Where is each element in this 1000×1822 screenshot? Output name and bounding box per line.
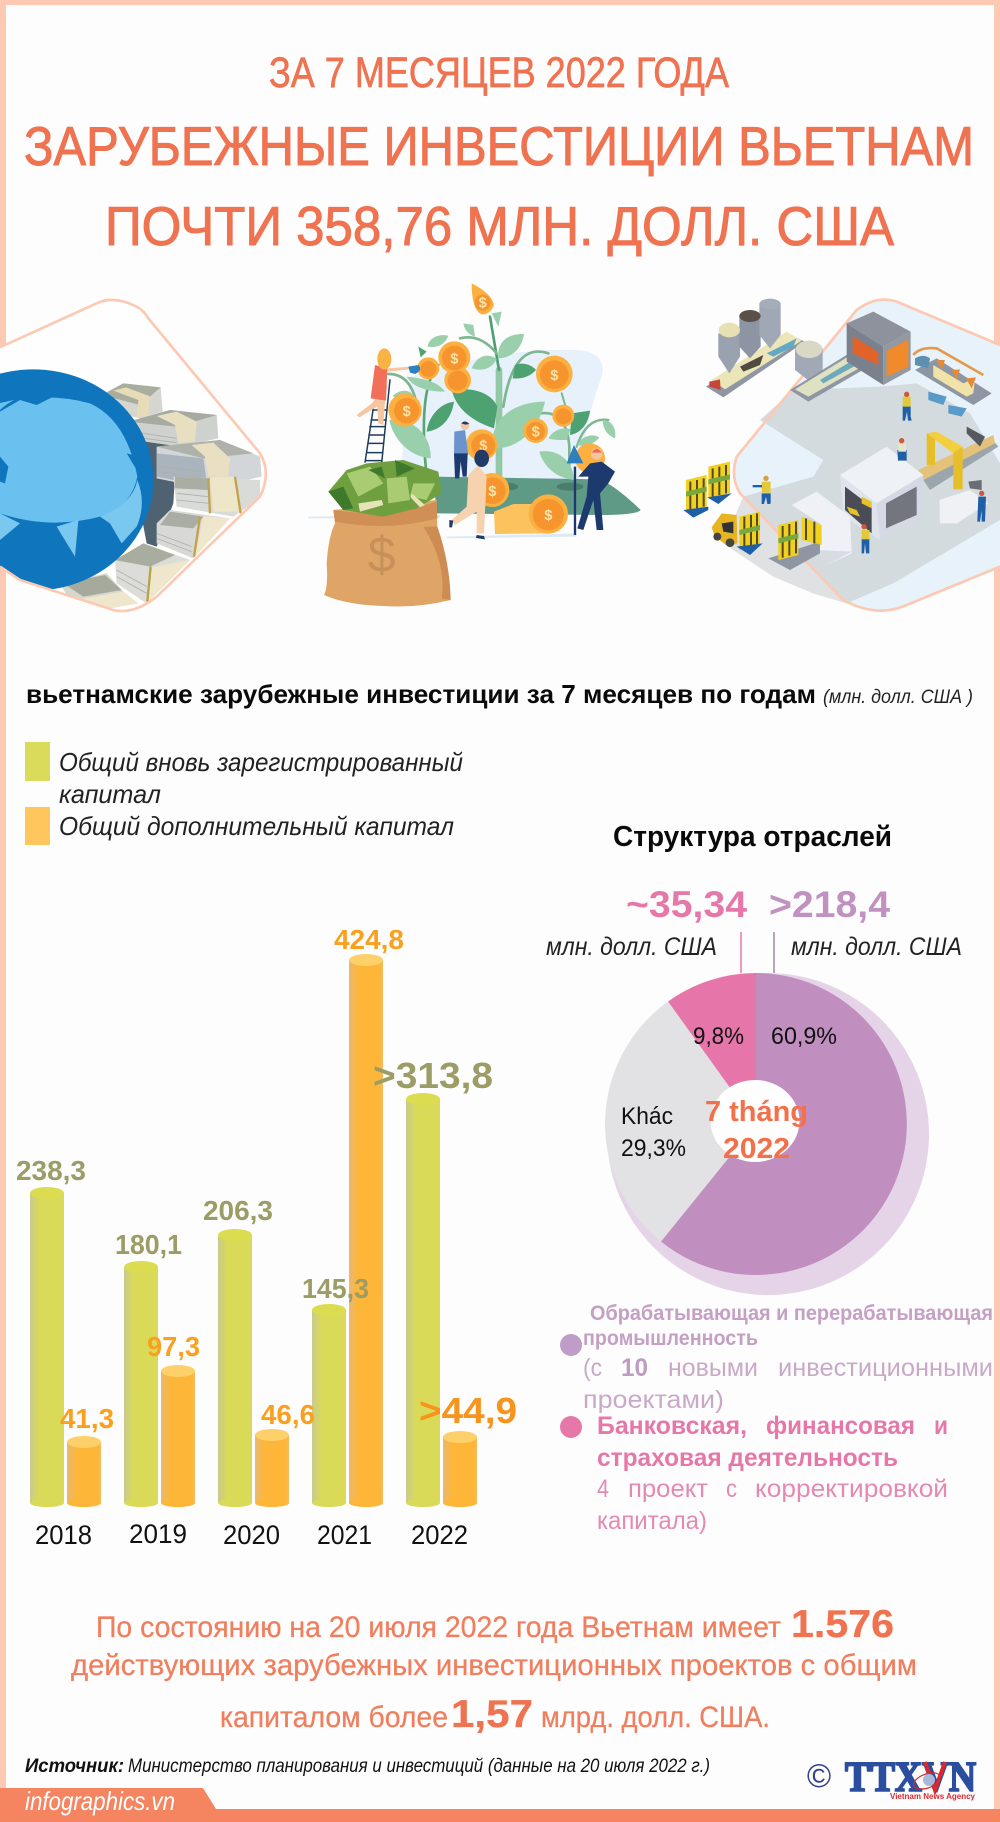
chart heading: вьетнамские зарубежные инвестиции за 7 месяцев по годам <box>26 679 816 709</box>
year labels: 2021 <box>317 1520 372 1550</box>
pie percentages: Khác <box>621 1103 673 1130</box>
packing gantry and conveyor <box>918 427 998 490</box>
legend: new capital label: Общий вновь зарегистрированный <box>59 747 463 777</box>
pie center label: 7 tháng <box>705 1096 808 1128</box>
furnace <box>847 312 911 385</box>
agency logo: Vietnam News Agency <box>890 1791 975 1801</box>
banknotes in sack <box>328 460 442 517</box>
copyright mark: © <box>807 1757 831 1794</box>
dollar marks on coins: $ <box>532 424 540 440</box>
year labels: 2020 <box>223 1520 280 1550</box>
bar chart <box>16 924 517 1550</box>
ladder <box>365 379 390 463</box>
pallets of goods <box>686 462 822 560</box>
dark leaves <box>418 347 590 435</box>
footer site name: infographics.vn <box>25 1786 175 1816</box>
legend: banking: с <box>726 1475 737 1503</box>
legend: banking: корректировкой <box>755 1475 948 1503</box>
slice: banking 9.8% <box>668 973 756 1124</box>
dollar marks on coins <box>403 296 558 524</box>
bars 2019 <box>124 1261 195 1507</box>
year labels: 2022 <box>411 1520 468 1550</box>
plant stems <box>388 317 608 477</box>
value: banking: ~35,34 <box>626 884 747 925</box>
source note: Министерство планирования и инвестиций (данные на 20 июля 2022 г.) <box>128 1755 710 1777</box>
bar value labels: 238,3 <box>16 1155 86 1186</box>
chart unit note: (млн. долл. США ) <box>823 687 973 708</box>
pie percentages <box>621 1023 837 1162</box>
legend: manufacturing: проектами) <box>583 1386 724 1414</box>
year labels <box>35 1519 468 1550</box>
summary text: капиталом более <box>220 1701 448 1734</box>
slice: other 29.3% <box>605 1002 756 1242</box>
title line 1: ЗА 7 МЕСЯЦЕВ 2022 ГОДА <box>269 49 729 97</box>
source note: Источник: <box>25 1755 124 1777</box>
money sack <box>324 460 451 607</box>
bar value labels: 46,6 <box>261 1399 315 1430</box>
bars 2018 <box>30 1187 101 1507</box>
workers <box>753 392 986 553</box>
bar value labels: 180,1 <box>115 1229 182 1260</box>
dollar marks on coins: $ <box>488 484 496 500</box>
legend: manufacturing: промышленность <box>583 1327 758 1350</box>
legend: banking <box>560 1412 948 1535</box>
dollar marks on coins: $ <box>479 296 487 312</box>
bar value labels: >313,8 <box>373 1055 493 1096</box>
agency logo: TTXVN <box>845 1755 976 1801</box>
footer bar <box>0 1788 1000 1822</box>
legend: banking: проект <box>628 1475 709 1503</box>
silos and conveyor <box>706 299 823 397</box>
legend: manufacturing <box>560 1302 993 1414</box>
factory floor <box>723 383 1000 603</box>
value: manufacturing: >218,4 <box>769 884 890 925</box>
bar value labels: 424,8 <box>334 924 404 955</box>
legend: new capital swatch <box>25 742 50 781</box>
bar value labels: 41,3 <box>60 1403 114 1434</box>
slice: manufacturing 60.9% <box>661 973 907 1275</box>
bar value labels: 206,3 <box>203 1195 273 1226</box>
filling line <box>913 348 992 417</box>
illustration: factory <box>683 299 1000 611</box>
pie chart <box>605 932 929 1295</box>
summary text: По состоянию на 20 июля 2022 года Вьетнам имеет <box>96 1611 781 1644</box>
second conveyor <box>790 347 880 402</box>
small machine and control desk <box>768 480 988 570</box>
unit: banking: млн. долл. США <box>546 933 717 961</box>
legend: banking: 4 <box>597 1475 609 1503</box>
legend: manufacturing: инвестиционными <box>778 1354 993 1382</box>
dollar marks on coins: $ <box>403 404 411 420</box>
legend: new capital label <box>59 747 463 809</box>
pie percentages: 29,3% <box>621 1135 686 1162</box>
legend: new capital label: капитал <box>59 779 161 809</box>
legend: banking: Банковская, <box>597 1412 747 1440</box>
legend: manufacturing: (с <box>583 1354 602 1382</box>
legend: additional capital swatch <box>25 807 50 845</box>
sector structure heading: Структура отраслей <box>613 821 892 853</box>
pie percentages: 60,9% <box>771 1023 837 1050</box>
bar value labels: 97,3 <box>147 1331 200 1362</box>
forklift <box>712 513 737 547</box>
year labels: 2018 <box>35 1520 92 1550</box>
legend: additional capital label: Общий дополнительный капитал <box>59 811 454 841</box>
coins <box>388 283 605 534</box>
woman on ladder <box>357 348 420 425</box>
illustration: globe and money <box>0 300 266 611</box>
pie center label <box>705 1096 808 1165</box>
summary text <box>71 1603 917 1736</box>
summary text: действующих зарубежных инвестиционных проектов с общим <box>71 1649 917 1682</box>
year labels: 2019 <box>129 1519 187 1549</box>
man in blue <box>454 421 469 478</box>
bar value labels: 145,3 <box>302 1273 369 1304</box>
legend: banking: страховая деятельность <box>597 1444 898 1472</box>
title line 3: ПОЧТИ 358,76 МЛН. ДОЛЛ. США <box>105 195 894 257</box>
dollar marks on coins: $ <box>544 508 552 524</box>
machine housing <box>840 447 923 540</box>
pale leaves <box>389 312 615 480</box>
bar value labels <box>16 924 517 1434</box>
dollar marks on coins: $ <box>450 351 458 367</box>
legend: manufacturing: 10 <box>621 1354 648 1382</box>
bars 2022 <box>406 1093 477 1507</box>
summary text: млрд. долл. США. <box>541 1701 770 1734</box>
bars 2021 <box>312 954 383 1507</box>
pie percentages: 9,8% <box>693 1023 744 1050</box>
legend: banking: капитала) <box>597 1507 707 1535</box>
money sack: $ <box>368 527 396 583</box>
summary text: 1,57 <box>451 1693 533 1736</box>
man with shovel <box>567 445 615 535</box>
illustration: money plants and sack <box>308 283 641 607</box>
woman with coin <box>449 450 489 539</box>
pie center label: 2022 <box>723 1133 790 1165</box>
legend: banking: финансовая <box>766 1412 915 1440</box>
summary text: 1.576 <box>791 1603 894 1646</box>
dollar marks on coins: $ <box>550 368 558 384</box>
legend: banking: и <box>934 1412 948 1440</box>
bars 2020 <box>218 1229 289 1507</box>
bar value labels: >44,9 <box>419 1390 517 1431</box>
dollar marks on coins: $ <box>479 439 487 455</box>
legend: manufacturing: новыми <box>668 1354 758 1382</box>
unit: manufacturing: млн. долл. США <box>791 933 962 961</box>
